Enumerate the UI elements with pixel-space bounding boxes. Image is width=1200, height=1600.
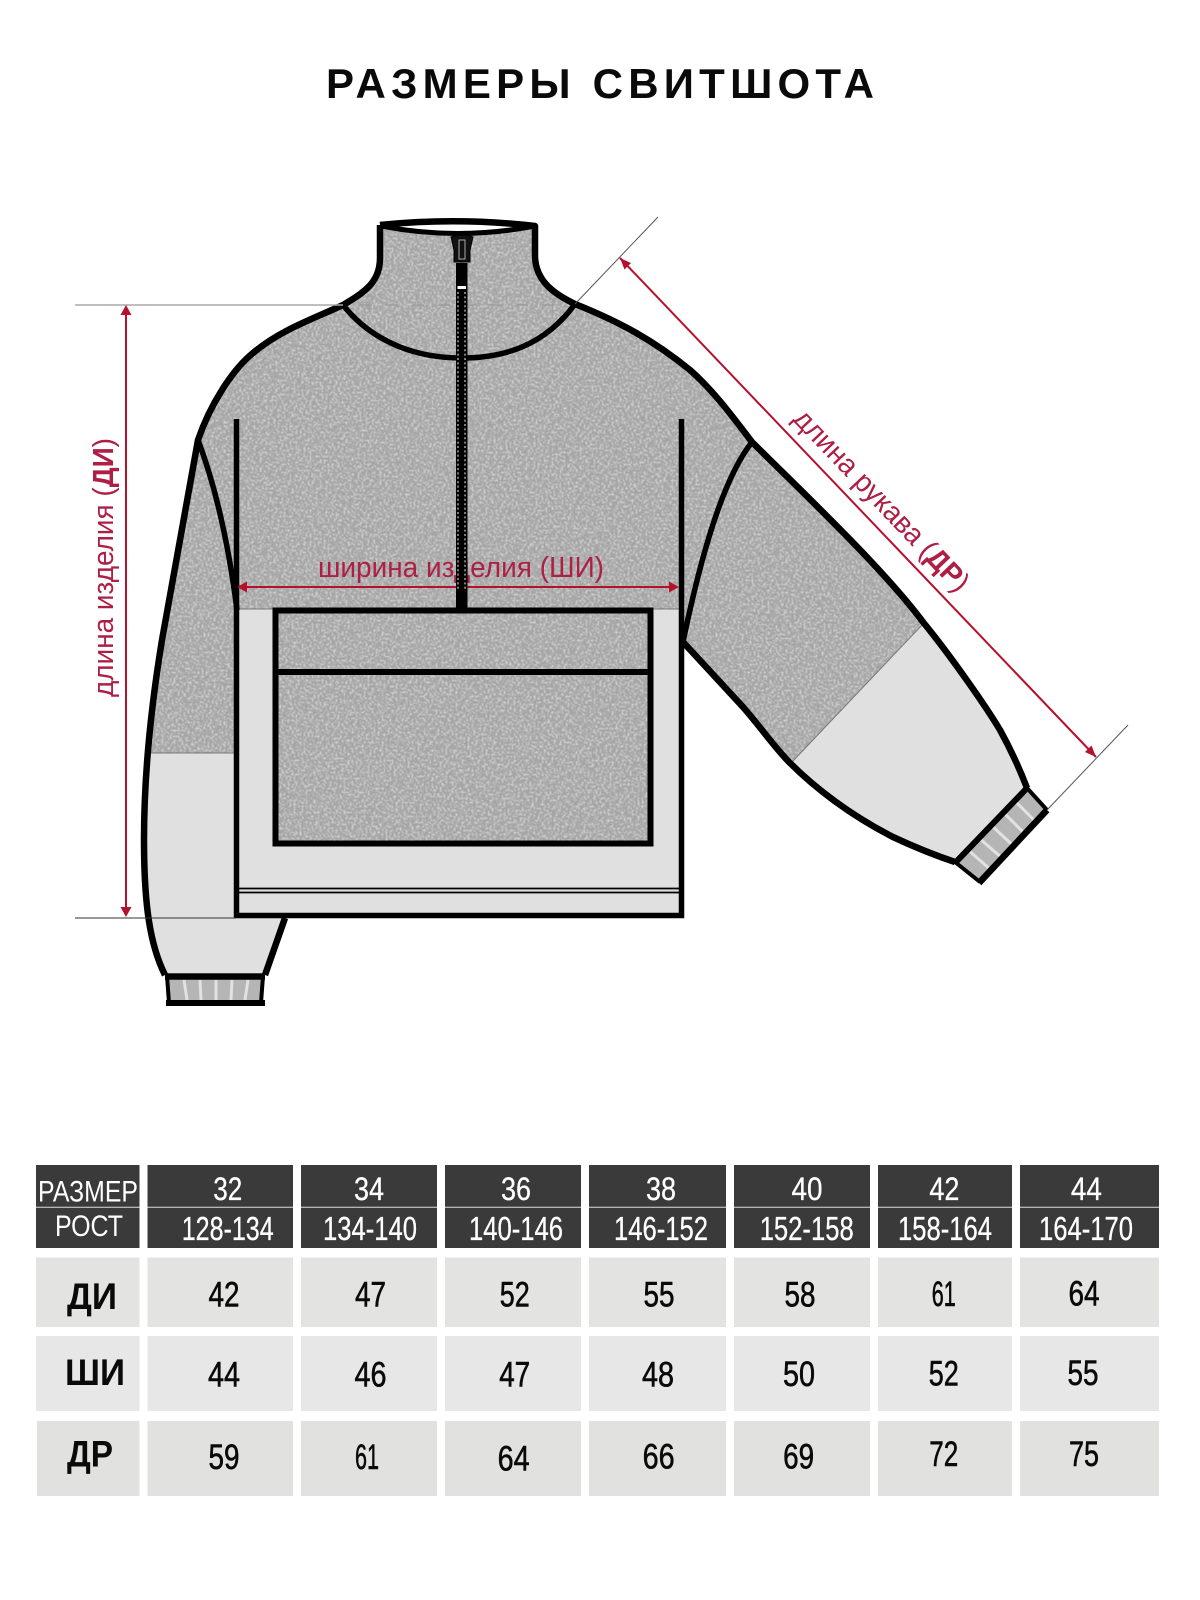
panel seams (147, 609, 923, 762)
table header: 32 (213, 1171, 242, 1207)
row: ДИ: 61 (932, 1275, 956, 1314)
neck seam (343, 304, 575, 358)
left cuff (165, 976, 265, 1003)
row: ДИ (36, 1258, 1159, 1327)
row: ШИ: 44 (208, 1356, 240, 1395)
row: ДИ: 55 (644, 1276, 674, 1315)
row: ШИ (36, 1336, 1159, 1411)
collar fold dashed line (360, 304, 560, 306)
arrow: sleeve length (620, 258, 1096, 757)
table header: 140-146 (469, 1210, 563, 1247)
kangaroo pocket (276, 610, 650, 844)
table header: 146-152 (614, 1210, 708, 1247)
table header: 36 (501, 1171, 531, 1207)
label: garment length: длина изделия (ДИ) (88, 438, 120, 697)
left sleeve light panel (144, 753, 285, 973)
row: ДР: 66 (643, 1438, 675, 1477)
table header: 164-170 (1039, 1210, 1133, 1247)
label: sleeve length: длина рукава (ДР) (787, 403, 976, 599)
row: ШИ: 46 (354, 1356, 386, 1395)
table header: 34 (354, 1171, 384, 1207)
table header: 128-134 (182, 1210, 274, 1247)
collar opening (392, 224, 518, 232)
sleeve bottom guide (1047, 725, 1128, 810)
right sleeve light panel (792, 624, 1027, 862)
pocket fleece fill (276, 611, 650, 843)
row: ДР: 69 (783, 1437, 814, 1476)
right armhole seam (683, 442, 752, 642)
table header: РАЗМЕР (38, 1176, 138, 1208)
table header: 44 (1071, 1171, 1102, 1207)
table header: 158-164 (898, 1210, 992, 1247)
body light panel (237, 609, 681, 915)
zipper (451, 235, 473, 608)
table header: 134-140 (323, 1210, 417, 1247)
row: ДИ: 52 (500, 1276, 530, 1315)
row: ШИ: ШИ (65, 1352, 125, 1393)
table header: РОСТ (55, 1210, 123, 1243)
body sides and hem (236, 419, 682, 916)
table header: 152-158 (760, 1210, 854, 1247)
row: ДР: 72 (929, 1435, 958, 1474)
table header: 40 (792, 1171, 822, 1207)
top measuring guide (75, 304, 343, 306)
row: ДИ: ДИ (67, 1276, 117, 1317)
zipper pull (451, 235, 473, 262)
row: ДИ: 47 (355, 1276, 386, 1315)
arrow: garment width (237, 582, 679, 592)
table header (36, 1165, 1159, 1248)
row: ДР (37, 1421, 1159, 1496)
right cuff (955, 787, 1047, 883)
bottom measuring guide (75, 917, 236, 919)
row: ДР: 64 (498, 1440, 530, 1479)
row: ШИ: 47 (499, 1356, 530, 1395)
sweatshirt outline (144, 221, 1027, 975)
row: ШИ: 55 (1068, 1354, 1098, 1393)
row: ДИ: 64 (1068, 1274, 1100, 1314)
row: ШИ: 52 (929, 1354, 959, 1394)
row: ДР: 59 (208, 1438, 240, 1477)
sweatshirt illustration (144, 221, 1047, 1003)
row: ДР: 61 (355, 1438, 379, 1477)
row: ДИ: 42 (208, 1276, 240, 1315)
row: ДР: 75 (1069, 1435, 1099, 1474)
row: ДИ: 58 (784, 1276, 816, 1315)
pocket flap line (276, 669, 650, 675)
row: ДР: ДР (67, 1434, 113, 1475)
left armhole seam (198, 440, 237, 610)
fleece silhouette (144, 223, 1027, 973)
arrow: length of garment (120, 305, 132, 917)
label: garment width: ширина изделия (ШИ) (318, 552, 604, 584)
title: РАЗМЕРЫ СВИТШОТА (326, 60, 874, 107)
collar inner edge (381, 226, 535, 234)
table header: 38 (646, 1171, 676, 1207)
row: ШИ: 48 (642, 1356, 674, 1395)
table header: 42 (929, 1171, 959, 1207)
hem double line (237, 888, 680, 892)
size table (36, 1165, 1159, 1496)
row: ШИ: 50 (783, 1355, 815, 1394)
sleeve top guide (575, 217, 658, 304)
